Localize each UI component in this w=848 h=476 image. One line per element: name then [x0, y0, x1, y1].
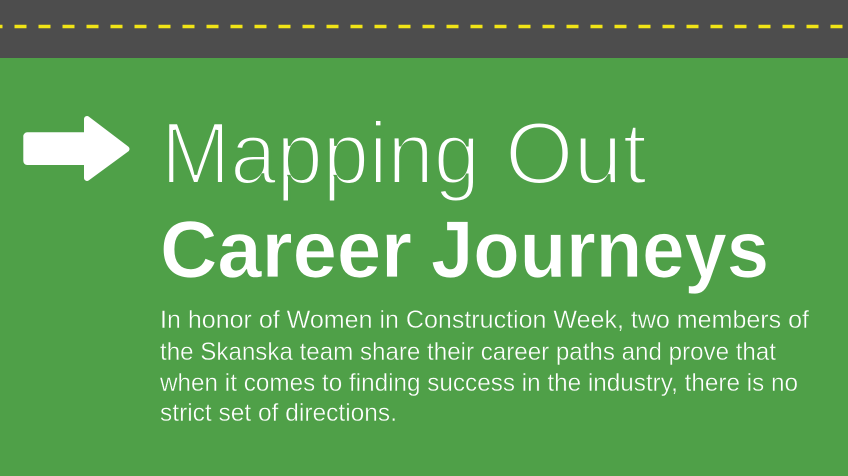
title — [160, 104, 769, 295]
title: Mapping — [161, 104, 480, 202]
road band — [0, 0, 848, 58]
intro text: when it comes to finding success in the industry, there is no — [159, 369, 798, 397]
title: Career — [160, 205, 412, 295]
intro text — [159, 306, 809, 427]
intro text: In honor of Women in Construction Week, two members of — [160, 306, 809, 334]
icon: arrow — [23, 119, 126, 178]
intro text: the Skanska team share their career paths and prove that — [160, 338, 776, 366]
title: Out — [505, 104, 647, 202]
title: Journeys — [431, 205, 769, 295]
intro text: strict set of directions. — [160, 399, 397, 427]
